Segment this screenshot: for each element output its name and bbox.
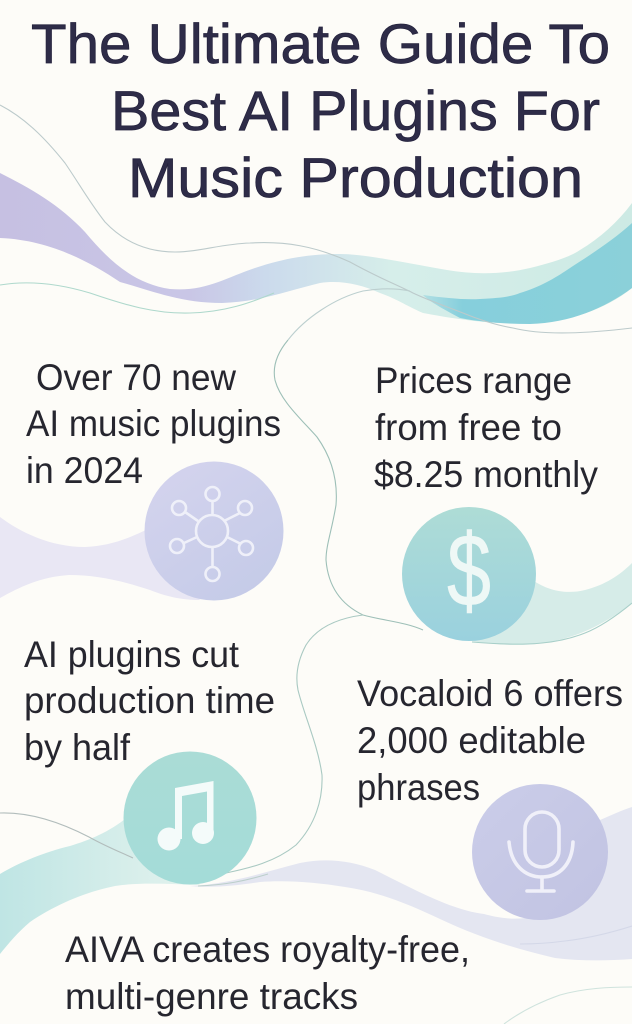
title: The Ultimate Guide To: [31, 12, 610, 75]
text: over 70 new plugins: [26, 357, 281, 491]
top wave band: [0, 173, 632, 324]
text: vocaloid: phrases: [357, 767, 480, 808]
title: Music Production: [128, 146, 583, 209]
text: AIVA: multi-genre tracks: [65, 976, 358, 1017]
icon: music note: [124, 752, 256, 884]
icon: dollar: [402, 507, 536, 641]
icon: microphone: [472, 784, 608, 920]
right teal wave: [465, 563, 632, 645]
left lavender wave: [0, 517, 200, 600]
text: production time: production time: [24, 680, 275, 721]
text: over 70 new plugins: AI music plugins: [26, 403, 281, 444]
title: Best AI Plugins For: [111, 79, 600, 142]
icon: network: [144, 462, 284, 600]
text: production time: AI plugins cut: [24, 634, 240, 675]
text: vocaloid: [357, 673, 623, 808]
text: over 70 new plugins: Over 70 new: [36, 357, 236, 398]
icon: dollar: $: [447, 513, 491, 628]
text: production time: by half: [24, 727, 131, 768]
lower-right lavender wave: [190, 807, 632, 960]
text: AIVA: AIVA creates royalty-free,: [65, 929, 470, 970]
text: AIVA: [65, 929, 470, 1017]
lower-left teal wave: [0, 815, 200, 954]
text: prices: Prices range: [375, 360, 572, 401]
text: prices: $8.25 monthly: [374, 454, 598, 495]
text: vocaloid: 2,000 editable: [357, 720, 586, 761]
text: prices: [374, 360, 598, 495]
text: vocaloid: Vocaloid 6 offers: [357, 673, 623, 714]
text: over 70 new plugins: in 2024: [26, 450, 143, 491]
text: prices: from free to: [375, 407, 562, 448]
title: [31, 12, 610, 209]
text: production time: [24, 634, 275, 768]
